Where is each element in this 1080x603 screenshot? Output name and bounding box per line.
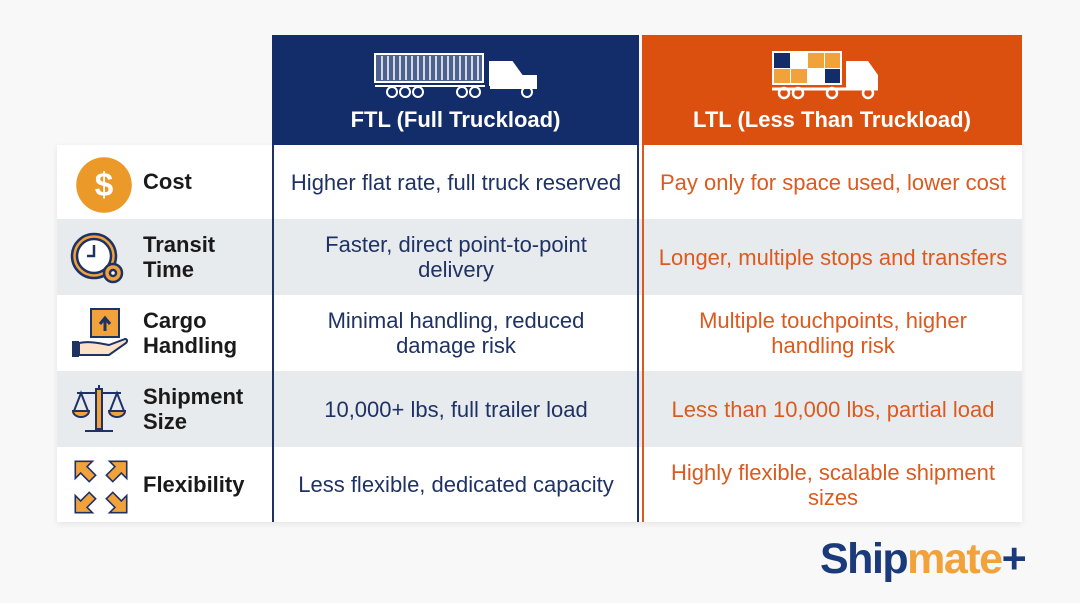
row label: Shipment Size (72, 384, 243, 434)
header: FTL (272, 35, 639, 145)
row label: Cost: Cost (143, 168, 192, 194)
icon: dollar coin: $ (95, 167, 114, 204)
text: Minimal handling, reduced (328, 308, 584, 333)
row label: Transit Time: Time (143, 257, 194, 282)
row label: Flexibility: Flexibility (143, 472, 244, 497)
text: 10,000+ lbs, full trailer load (324, 396, 588, 422)
icon: puzzle truck (772, 51, 878, 100)
header: FTL: FTL (Full Truckload) (351, 107, 560, 132)
text: Less flexible, dedicated capacity (298, 472, 614, 497)
row label: Cost (76, 157, 192, 213)
row label: Cargo Handling: Cargo (143, 308, 207, 333)
text: sizes (808, 484, 858, 510)
icon: scale (72, 385, 126, 432)
row label: Shipment Size: Size (143, 409, 187, 434)
logo: Shipmate+: Shipmate+ (820, 535, 1025, 583)
table background (57, 145, 1022, 522)
text: Less than 10,000 lbs, partial load (672, 396, 994, 422)
row label: Flexibility (74, 460, 244, 514)
row label: Shipment Size: Shipment (143, 384, 243, 409)
row label: Cargo Handling (72, 308, 237, 358)
text: Highly flexible, scalable shipment (671, 460, 995, 484)
text: handling risk (771, 333, 895, 358)
icon: dollar coin (76, 157, 132, 213)
row label: Transit Time: Transit (143, 232, 215, 257)
text: delivery (418, 257, 494, 282)
icon: hand with box (72, 308, 128, 357)
row label: Transit Time (70, 232, 215, 284)
LTL cells: Pay only for space used, lower cost (660, 170, 1006, 194)
text: Multiple touchpoints, higher (699, 308, 967, 333)
text: Longer, multiple stops and transfers (659, 244, 1007, 270)
header: LTL: LTL (Less Than Truckload) (693, 107, 971, 132)
header: LTL (642, 35, 1022, 145)
FTL cells: Higher flat rate, full truck reserved (291, 170, 621, 194)
icon: clock gear (70, 232, 124, 284)
row label: Cargo Handling: Handling (143, 333, 237, 358)
icon: expand arrows (74, 460, 128, 514)
icon: full truck (374, 53, 537, 98)
text: Faster, direct point-to-point (325, 232, 587, 257)
text: damage risk (396, 333, 516, 358)
